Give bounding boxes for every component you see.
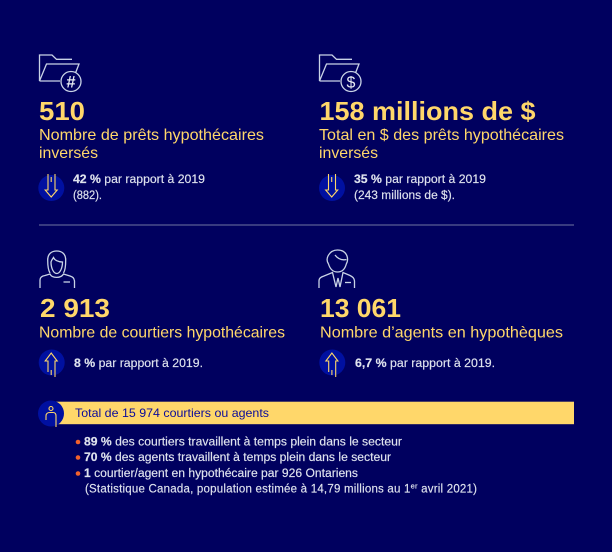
icon: down arrow [38,174,64,201]
panel: courtiers [39,251,285,377]
big number: 2 913: 2 913 [40,293,110,323]
text: variation 6,7 %: 6,7 % par rapport à 2019. [355,358,495,370]
label: total en dollars [319,127,564,162]
label: nombre de prêts: inversés [39,145,98,162]
text: variation 42 %: 42 % par rapport à 2019 [73,174,205,186]
text: variation 42 %: (882). [73,190,102,202]
banner text: Total de 15 974 courtiers ou agents [75,406,269,420]
icon: up arrow [319,350,345,377]
icon: man in suit [319,250,354,288]
text: variation 35 %: (243 millions de $). [354,190,455,202]
bullet list: 89 % des courtiers travaillent à temps plein dans le secteur [84,436,402,448]
icon: person badge [38,400,64,427]
banner bar [52,402,574,424]
bullet list: (Statistique Canada, population estimée à 14,79 millions au 1 [85,484,410,496]
label: nombre de prêts [39,127,264,162]
text: variation 42 % [73,174,205,202]
panel: total des courtiers et agents [38,400,574,496]
bullet list: avril 2021) [418,484,477,496]
bullet list: 1 courtier/agent en hypothécaire par 926 Ontariens [84,468,358,480]
bullet list: 70 % des agents travaillent à temps plein dans le secteur [84,452,391,464]
label: nombre de courtiers: Nombre de courtiers hypothécaires [39,324,285,342]
icon: folder with dollar: $ [347,74,356,91]
label: nombre d'agents: Nombre d’agents en hypothèques [320,324,563,342]
icon: woman [40,251,74,288]
big number: 158 millions de $: 158 millions de $ [320,96,536,126]
icon: folder with hash [40,55,81,92]
icon: folder with hash: # [66,73,76,91]
label: total en dollars: inversés [319,145,378,162]
panel: agents [319,250,563,377]
panel: prêts inversés en dollars [319,55,564,202]
panel: prêts inversés en nombre [38,55,264,202]
label: nombre de prêts: Nombre de prêts hypothécaires [39,127,264,144]
text: variation 35 % [354,174,486,202]
icon: down arrow [319,174,345,201]
bullet list [76,436,477,496]
big number: 13 061: 13 061 [320,293,401,323]
bullet list: er [411,482,418,490]
text: variation 35 %: 35 % par rapport à 2019 [354,174,486,186]
label: total en dollars: Total en $ des prêts hypothécaires [319,127,564,144]
icon: folder with dollar [320,55,361,92]
text: variation 8 %: 8 % par rapport à 2019. [74,358,203,370]
icon: up arrow [39,350,65,377]
big number: 510: 510 [39,96,85,126]
